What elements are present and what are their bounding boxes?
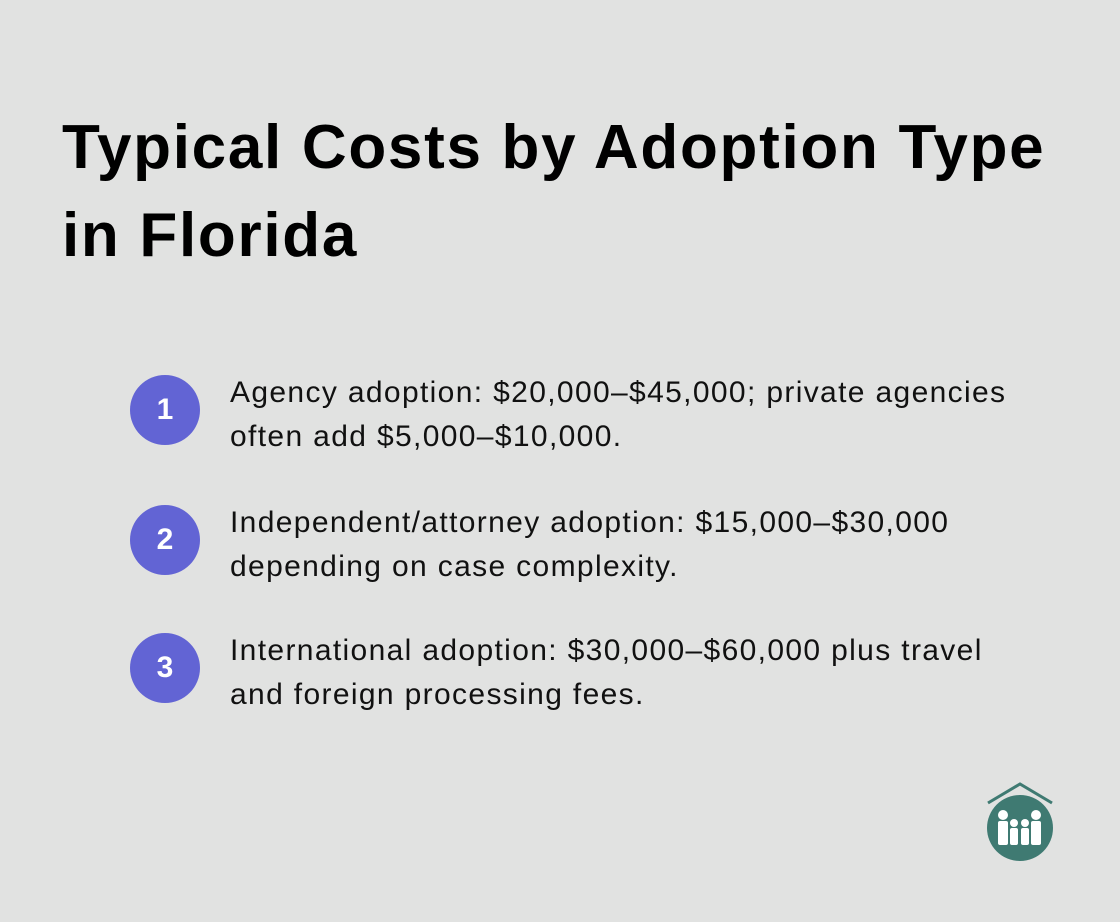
number 2 (130, 505, 200, 575)
item 2 (130, 505, 949, 583)
text 3: and foreign processing fees. (230, 678, 645, 711)
number 3: 3 (157, 651, 173, 684)
number 2: 2 (157, 523, 173, 556)
title: in Florida (62, 201, 358, 270)
item 1 (130, 375, 1006, 453)
text 1 (230, 376, 1006, 453)
text 3: International adoption: $30,000–$60,000 plus travel (230, 634, 983, 667)
text 2: Independent/attorney adoption: $15,000–$30,000 (230, 506, 949, 539)
text 1: Agency adoption: $20,000–$45,000; private agencies (230, 376, 1006, 409)
text 2: depending on case complexity. (230, 550, 679, 583)
text 1: often add $5,000–$10,000. (230, 420, 622, 453)
icon: logo (987, 782, 1053, 861)
title (62, 113, 1045, 270)
title: Typical Costs by Adoption Type (62, 113, 1045, 182)
number 1: 1 (157, 393, 173, 426)
text 2 (230, 506, 949, 583)
number 1 (130, 375, 200, 445)
item 3 (130, 633, 983, 711)
text 3 (230, 634, 983, 711)
number 3 (130, 633, 200, 703)
